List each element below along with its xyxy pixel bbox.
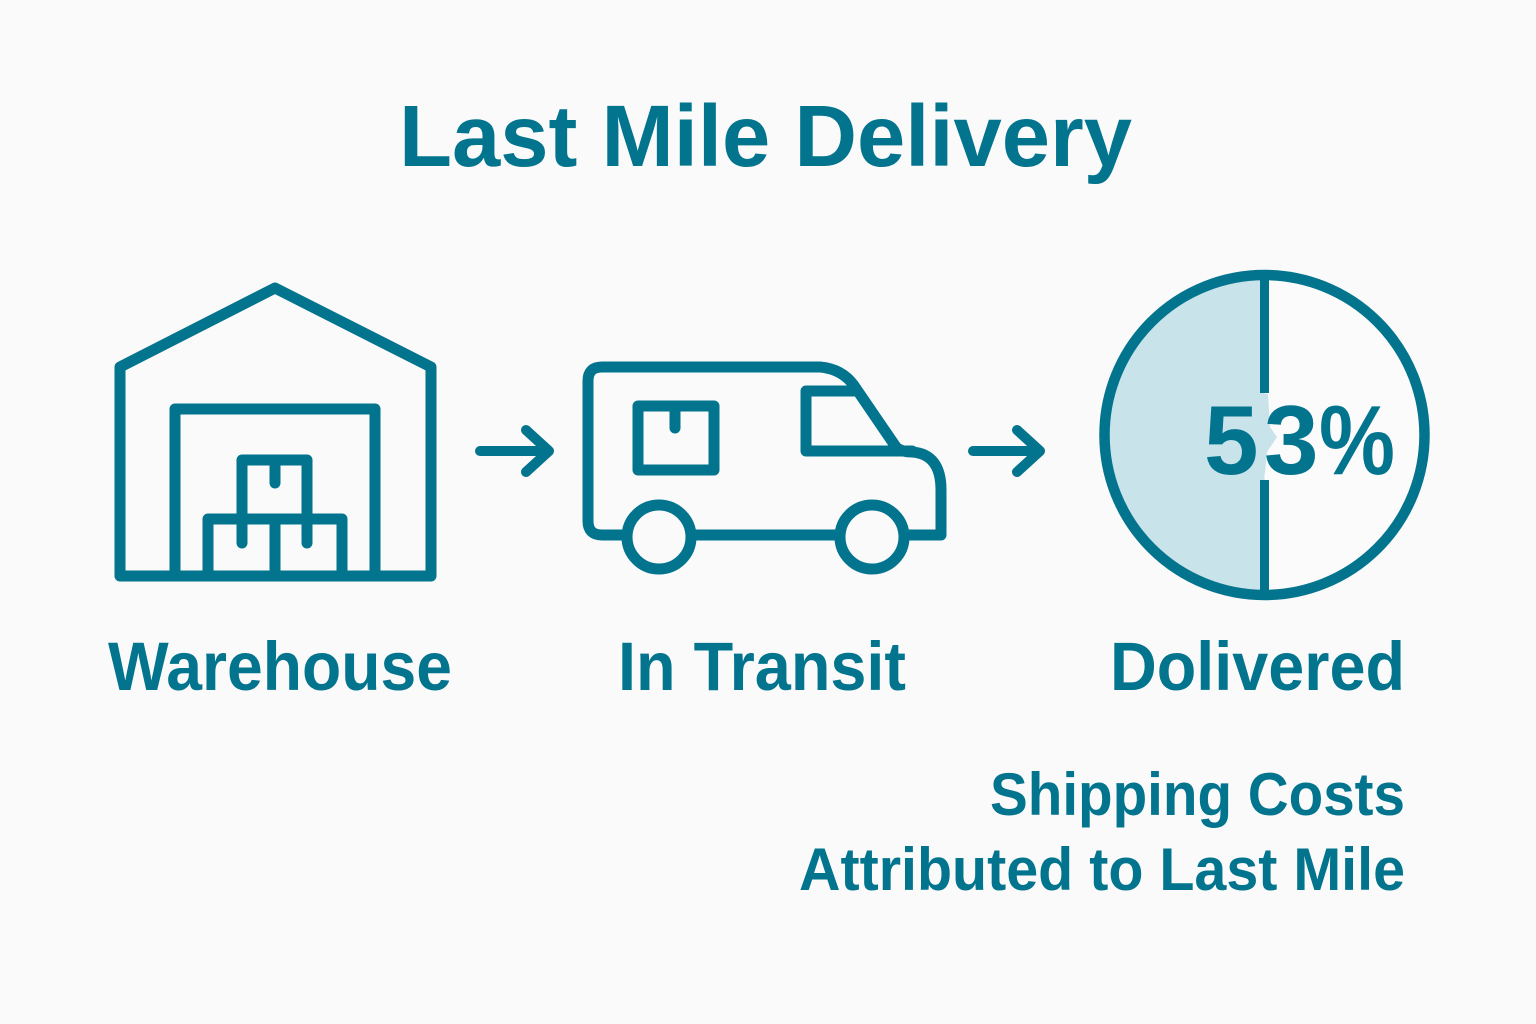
caption: shipping costs <box>799 761 1405 903</box>
pie value: 5 <box>1204 385 1259 495</box>
arrow: warehouse to transit <box>480 430 549 472</box>
arrow: transit to delivered <box>973 430 1040 472</box>
title: Last Mile Delivery <box>399 88 1132 185</box>
pie value: 3 <box>1264 385 1319 495</box>
label: warehouse: Warehouse <box>108 628 452 705</box>
label: delivered: Dolivered <box>1110 628 1405 705</box>
caption: shipping costs: Attributed to Last Mile <box>799 836 1405 903</box>
caption: shipping costs: Shipping Costs <box>990 761 1405 828</box>
icon: warehouse <box>120 288 431 576</box>
icon: delivery van <box>588 367 941 569</box>
pie value: % <box>1319 385 1395 495</box>
label: in transit: In Transit <box>618 628 906 705</box>
pie chart: 53% <box>1104 275 1424 595</box>
